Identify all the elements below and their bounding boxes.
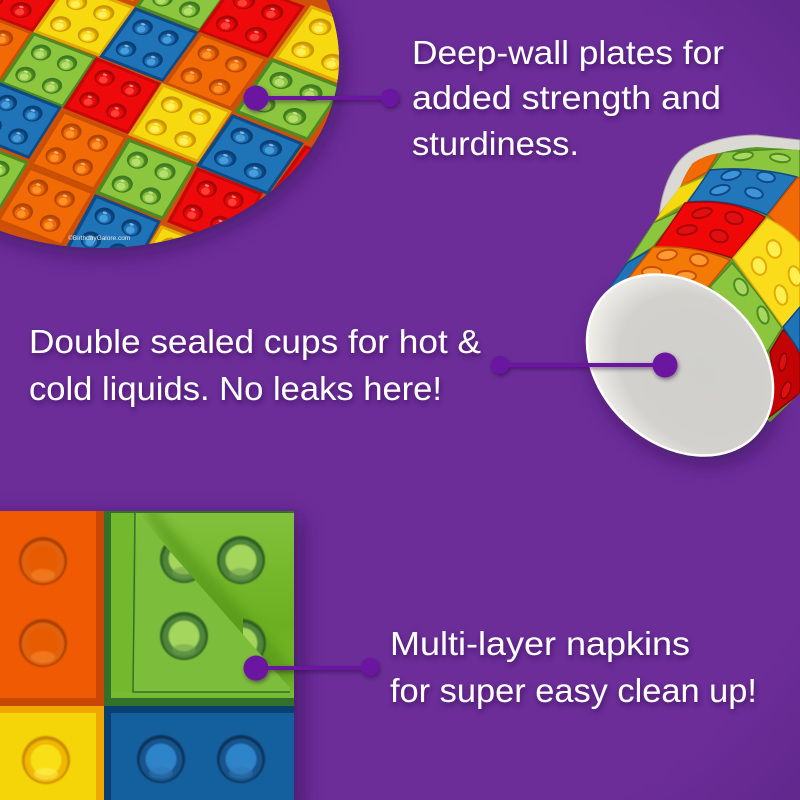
cup xyxy=(582,134,800,472)
connector: plates xyxy=(244,86,399,110)
napkin shadow xyxy=(0,516,302,800)
napkin folded corner xyxy=(133,513,290,692)
caption: plates xyxy=(412,34,724,162)
plate xyxy=(0,0,350,264)
cup brick body xyxy=(608,147,800,422)
plate shadow xyxy=(0,0,343,256)
connector: napkins xyxy=(244,656,379,680)
napkin green block xyxy=(104,507,304,706)
caption: napkins: Multi-layer napkins xyxy=(390,625,690,662)
copyright mark: ©BirthdayGalore.com xyxy=(68,234,130,242)
caption: plates: sturdiness. xyxy=(412,125,579,162)
cup shadow xyxy=(553,243,800,501)
napkin blue block xyxy=(104,706,294,800)
napkin xyxy=(0,507,304,800)
plate brick pattern xyxy=(0,0,339,248)
connector: cups xyxy=(491,352,678,378)
caption: cups: Double sealed cups for hot & xyxy=(29,323,481,360)
caption: napkins: for super easy clean up! xyxy=(390,672,757,709)
cup base xyxy=(551,237,800,493)
napkin yellow block xyxy=(0,706,104,800)
caption: plates: Deep-wall plates for xyxy=(412,34,724,71)
napkin orange block xyxy=(0,511,104,706)
caption: napkins xyxy=(390,625,757,709)
cup studs xyxy=(642,151,800,400)
caption: plates: added strength and xyxy=(412,79,721,116)
caption: cups xyxy=(29,323,481,407)
cup rim xyxy=(659,135,800,216)
caption: cups: cold liquids. No leaks here! xyxy=(29,370,442,407)
